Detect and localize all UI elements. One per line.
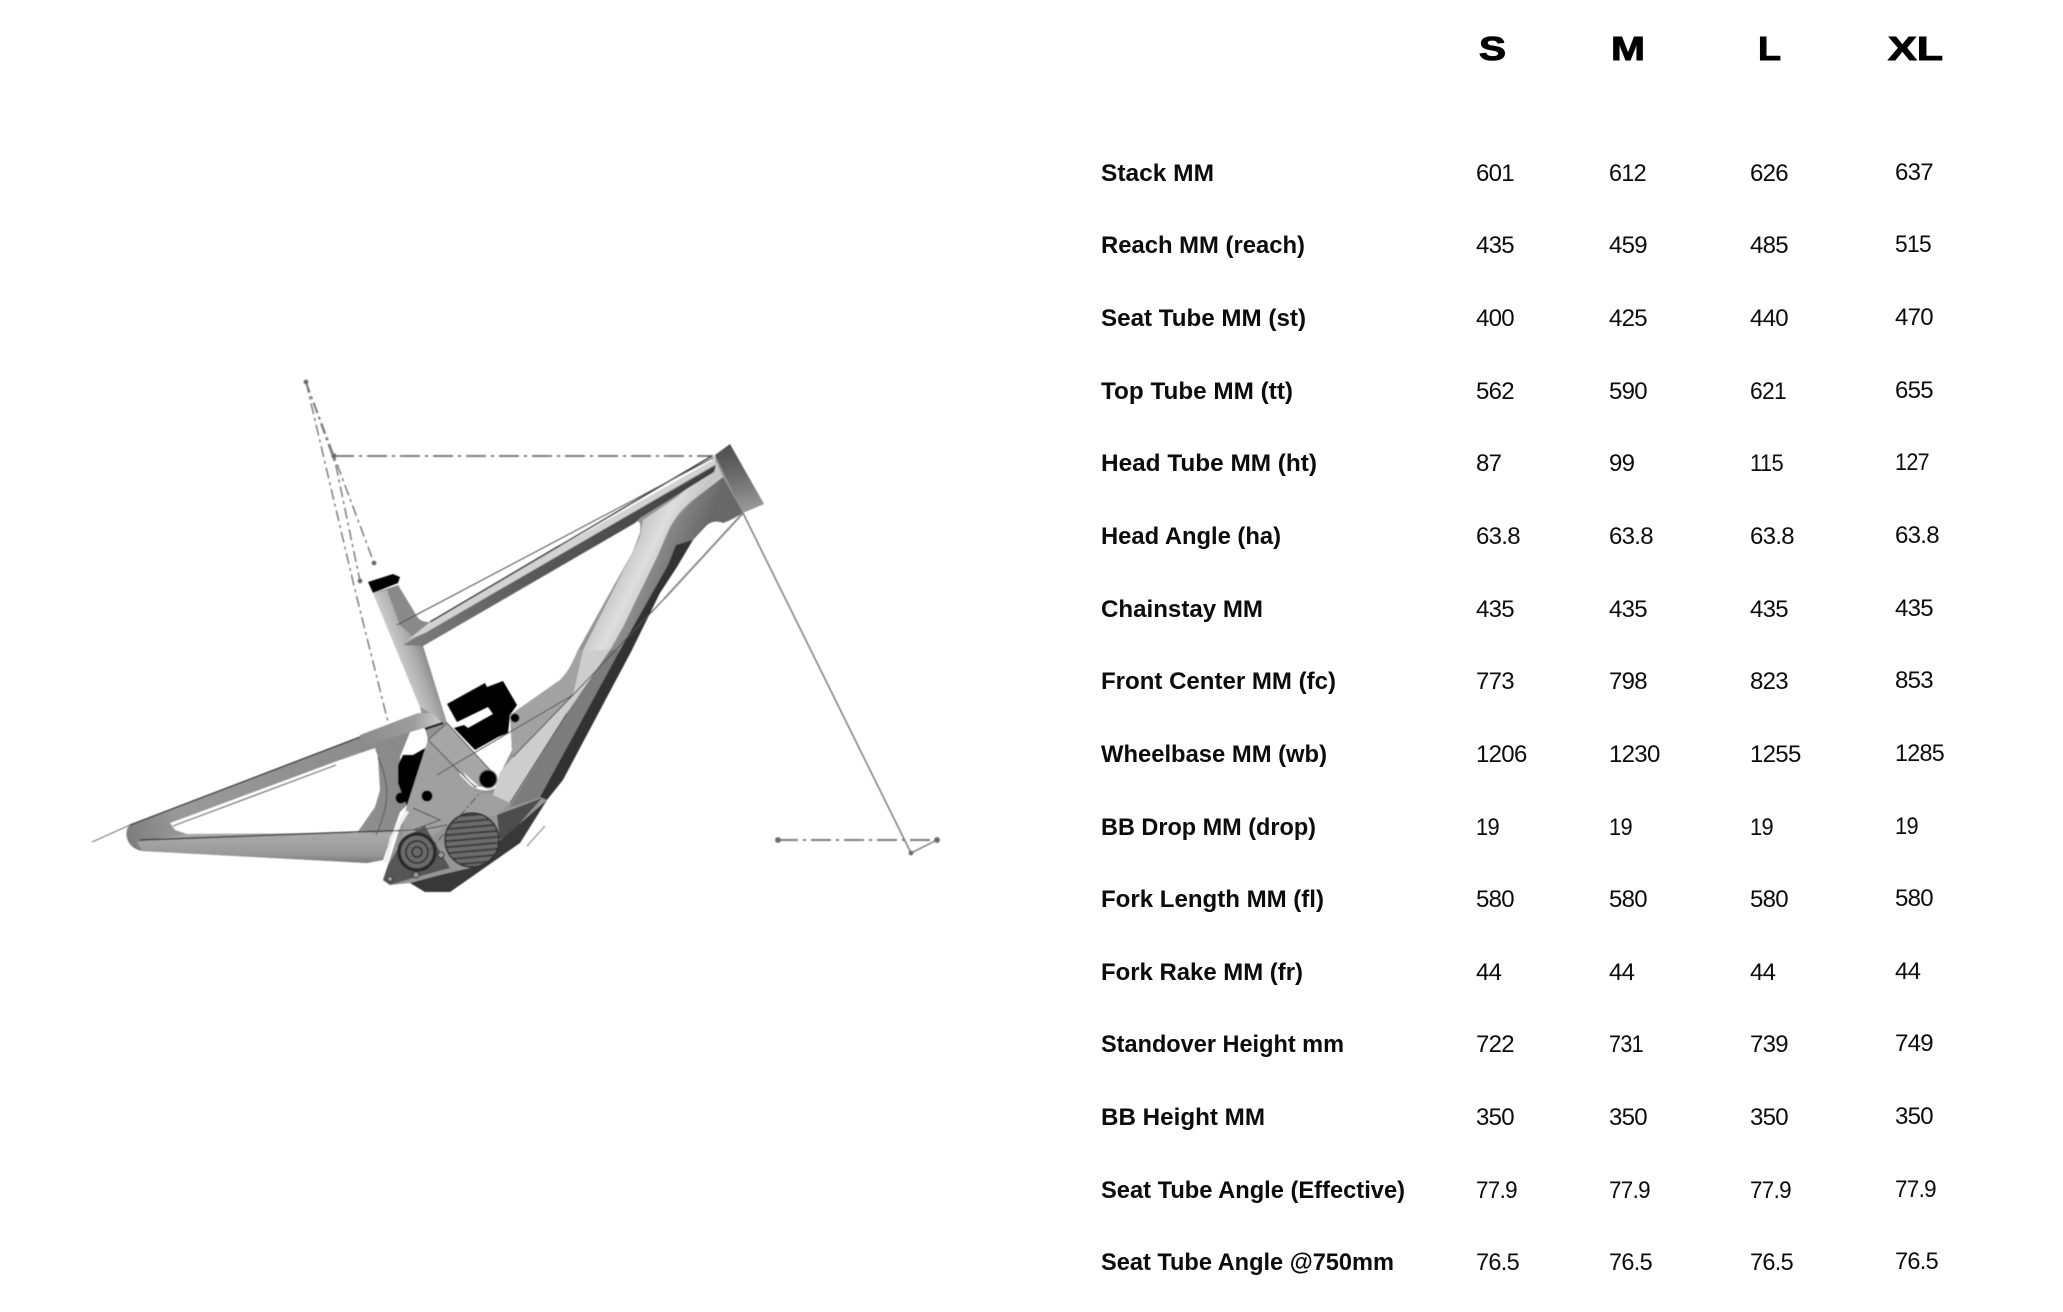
row: Seat Tube Angle (Effective): 77.9	[1750, 1177, 1791, 1204]
size headers: S	[1479, 31, 1506, 68]
row: Reach MM (reach)	[1101, 231, 1931, 259]
row: Seat Tube Angle @750mm: 76.5	[1476, 1249, 1519, 1276]
row: Seat Tube MM (st): 440	[1750, 305, 1788, 332]
row: Head Tube MM (ht): 87	[1476, 450, 1502, 477]
row: Top Tube MM (tt): 621	[1750, 378, 1786, 405]
down tube lower light strip	[493, 650, 610, 803]
row: Fork Rake MM (fr): 44	[1476, 959, 1502, 986]
main frame	[373, 444, 764, 892]
row: Top Tube MM (tt): Top Tube MM (tt)	[1101, 378, 1293, 405]
row: Seat Tube Angle @750mm	[1101, 1248, 1938, 1276]
row: Front Center MM (fc): 853	[1895, 667, 1933, 694]
row: Chainstay MM: 435	[1609, 596, 1647, 623]
row: Wheelbase MM (wb): Wheelbase MM (wb)	[1101, 741, 1327, 768]
row: BB Height MM: BB Height MM	[1101, 1104, 1265, 1131]
row: BB Height MM: 350	[1895, 1103, 1933, 1130]
row: Head Tube MM (ht): 127	[1895, 449, 1929, 476]
seat gusset	[405, 598, 426, 623]
row: Fork Length MM (fl): 580	[1750, 886, 1788, 913]
row: Seat Tube Angle (Effective): 77.9	[1895, 1176, 1936, 1203]
row: Seat Tube Angle (Effective): 77.9	[1609, 1177, 1650, 1204]
row: Stack MM: 637	[1895, 159, 1933, 186]
row: Seat Tube MM (st): 400	[1476, 305, 1514, 332]
row: BB Drop MM (drop)	[1101, 813, 1918, 841]
row: Wheelbase MM (wb): 1255	[1750, 741, 1801, 768]
size headers: XL	[1888, 31, 1943, 68]
row: Seat Tube MM (st): Seat Tube MM (st)	[1101, 305, 1306, 332]
row: Seat Tube MM (st): 425	[1609, 305, 1647, 332]
construction lines	[92, 380, 940, 855]
row: Front Center MM (fc): Front Center MM (fc)	[1101, 668, 1336, 695]
link pivots	[396, 790, 432, 804]
rear triangle	[126, 713, 442, 863]
row: Front Center MM (fc): 823	[1750, 668, 1788, 695]
geometry table	[1101, 31, 1944, 1276]
row: Head Angle (ha): 63.8	[1750, 523, 1794, 550]
down tube lower mid band	[510, 650, 620, 807]
row: Front Center MM (fc)	[1101, 667, 1933, 695]
row: Chainstay MM: 435	[1750, 596, 1788, 623]
row: Fork Length MM (fl): 580	[1609, 886, 1647, 913]
row: Fork Rake MM (fr): 44	[1609, 959, 1635, 986]
row: Top Tube MM (tt)	[1101, 377, 1933, 405]
row: Front Center MM (fc): 798	[1609, 668, 1647, 695]
row: Reach MM (reach): 515	[1895, 231, 1931, 258]
motor housing	[497, 798, 542, 840]
chainring	[399, 834, 435, 870]
row: Chainstay MM: 435	[1895, 595, 1933, 622]
crank plate	[383, 826, 450, 885]
row: Head Tube MM (ht)	[1101, 449, 1929, 477]
row: BB Drop MM (drop): BB Drop MM (drop)	[1101, 814, 1316, 841]
row: Stack MM: 626	[1750, 160, 1788, 187]
top tube dark band	[403, 465, 716, 646]
row: Chainstay MM: 435	[1476, 596, 1514, 623]
row: Head Angle (ha)	[1101, 522, 1939, 550]
row: Fork Length MM (fl): 580	[1476, 886, 1514, 913]
down tube light strip	[583, 463, 723, 650]
row: Head Tube MM (ht): 115	[1750, 450, 1783, 477]
size headers: M	[1611, 31, 1645, 68]
row: Top Tube MM (tt): 562	[1476, 378, 1514, 405]
row: Seat Tube Angle @750mm: 76.5	[1750, 1249, 1793, 1276]
row: Seat Tube Angle @750mm: Seat Tube Angle @750mm	[1101, 1249, 1394, 1276]
top tube highlight lines	[430, 456, 712, 622]
row: BB Height MM: 350	[1609, 1104, 1647, 1131]
down tube upper mid band	[610, 477, 743, 650]
row: Standover Height mm: 722	[1476, 1031, 1514, 1058]
row: Fork Length MM (fl)	[1101, 885, 1933, 913]
row: Fork Rake MM (fr): 44	[1750, 959, 1776, 986]
lower link plate	[403, 742, 508, 838]
seat clamp	[368, 574, 400, 593]
row: Reach MM (reach): Reach MM (reach)	[1101, 232, 1305, 259]
frame shading	[373, 444, 764, 865]
size headers	[1479, 31, 1943, 68]
motor	[445, 813, 499, 867]
stay hairlines	[130, 718, 410, 840]
row: Head Angle (ha): Head Angle (ha)	[1101, 523, 1281, 550]
shock mount bolt	[510, 714, 520, 722]
row: Fork Rake MM (fr)	[1101, 958, 1921, 986]
row: Standover Height mm	[1101, 1030, 1933, 1058]
lower motor guard	[410, 800, 547, 892]
row: Top Tube MM (tt): 590	[1609, 378, 1647, 405]
white chain sliver	[384, 810, 409, 863]
shock	[447, 681, 517, 750]
rear shock body	[398, 740, 436, 808]
row: Wheelbase MM (wb): 1230	[1609, 741, 1660, 768]
row: Wheelbase MM (wb)	[1101, 740, 1944, 768]
row: Fork Rake MM (fr): 44	[1895, 958, 1921, 985]
row: Reach MM (reach): 435	[1476, 232, 1514, 259]
overlay thin lines	[370, 458, 743, 852]
motor guard tick	[527, 826, 545, 846]
row: Fork Length MM (fl): 580	[1895, 885, 1933, 912]
row: Seat Tube Angle @750mm: 76.5	[1895, 1248, 1938, 1275]
rocker link	[428, 723, 492, 787]
row: Standover Height mm: Standover Height mm	[1101, 1031, 1344, 1058]
bike frame geometry diagram	[92, 380, 940, 892]
row: Wheelbase MM (wb): 1206	[1476, 741, 1527, 768]
row: Stack MM: 601	[1476, 160, 1514, 187]
row: Stack MM: Stack MM	[1101, 160, 1214, 187]
row: BB Drop MM (drop): 19	[1895, 813, 1918, 840]
rocker pivot	[479, 770, 497, 788]
row: Standover Height mm: 739	[1750, 1031, 1788, 1058]
row: Seat Tube Angle (Effective): Seat Tube Angle (Effective)	[1101, 1177, 1405, 1204]
row: Chainstay MM: Chainstay MM	[1101, 596, 1263, 623]
row: BB Height MM: 350	[1750, 1104, 1788, 1131]
row: BB Drop MM (drop): 19	[1750, 814, 1773, 841]
row: Reach MM (reach): 485	[1750, 232, 1788, 259]
row: Head Angle (ha): 63.8	[1476, 523, 1520, 550]
row: Head Tube MM (ht): 99	[1609, 450, 1635, 477]
row: Head Tube MM (ht): Head Tube MM (ht)	[1101, 450, 1317, 477]
row: Fork Rake MM (fr): Fork Rake MM (fr)	[1101, 959, 1303, 986]
row: Fork Length MM (fl): Fork Length MM (fl)	[1101, 886, 1324, 913]
row: Seat Tube Angle (Effective)	[1101, 1176, 1936, 1204]
row: Reach MM (reach): 459	[1609, 232, 1647, 259]
row: Head Angle (ha): 63.8	[1895, 522, 1939, 549]
row: Seat Tube Angle (Effective): 77.9	[1476, 1177, 1517, 1204]
row: Standover Height mm: 749	[1895, 1030, 1933, 1057]
size headers: L	[1758, 31, 1781, 68]
stay end over seat tube	[360, 713, 442, 747]
head tube	[715, 444, 760, 502]
row: Stack MM	[1101, 159, 1933, 187]
row: Wheelbase MM (wb): 1285	[1895, 740, 1944, 767]
row: BB Drop MM (drop): 19	[1476, 814, 1499, 841]
row: Head Angle (ha): 63.8	[1609, 523, 1653, 550]
row: Seat Tube Angle @750mm: 76.5	[1609, 1249, 1652, 1276]
row: Front Center MM (fc): 773	[1476, 668, 1514, 695]
top tube light band	[408, 455, 716, 640]
row: Chainstay MM	[1101, 595, 1933, 623]
row: Top Tube MM (tt): 655	[1895, 377, 1933, 404]
seat tube	[373, 590, 447, 723]
row: Stack MM: 612	[1609, 160, 1646, 187]
shoulder plate	[510, 650, 583, 757]
dropout bolts	[388, 852, 444, 882]
stay end slot	[425, 723, 443, 729]
lower chainstay surface	[137, 830, 392, 863]
rocker crescent	[463, 772, 490, 790]
row: Seat Tube MM (st): 470	[1895, 304, 1933, 331]
dark down tube band	[540, 540, 693, 800]
row: BB Height MM	[1101, 1103, 1933, 1131]
row: BB Height MM: 350	[1476, 1104, 1514, 1131]
row: BB Drop MM (drop): 19	[1609, 814, 1632, 841]
row: Seat Tube MM (st)	[1101, 304, 1933, 332]
row: Standover Height mm: 731	[1609, 1031, 1643, 1058]
